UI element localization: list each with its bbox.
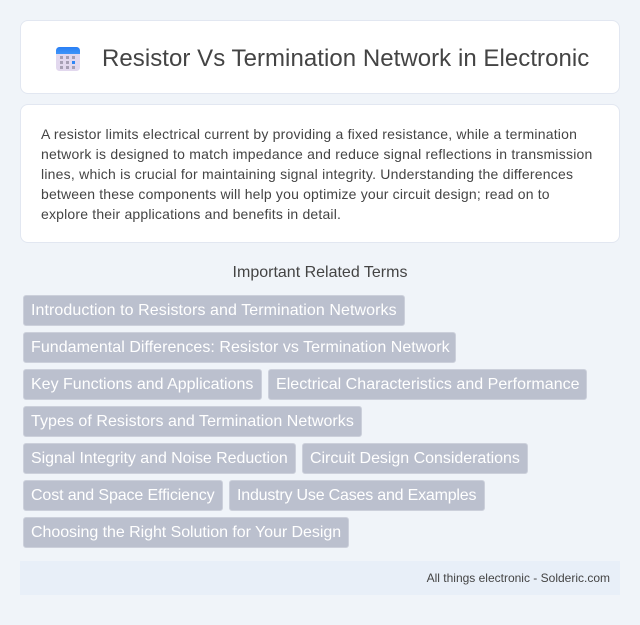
- description text: A resistor limits electrical current by providing a fixed resistance, while a termination: [41, 126, 577, 142]
- tag: Fundamental Differences: Resistor vs Termination Network: [31, 339, 450, 356]
- description text: [41, 126, 593, 222]
- tag: [23, 443, 296, 474]
- description text: explore their applications and benefits in detail.: [41, 206, 341, 222]
- description text: between these components will help you optimize your circuit design; read on to: [41, 186, 550, 202]
- tag: Industry Use Cases and Examples: [237, 487, 476, 504]
- tag: Electrical Characteristics and Performance: [276, 376, 580, 393]
- description text: network is designed to match impedance and reduce signal reflections in transmission: [41, 146, 593, 162]
- panel: description: [20, 104, 620, 243]
- description text: lines, which is crucial for maintaining signal integrity. Understanding the differences: [41, 166, 573, 182]
- footer bar: [20, 561, 620, 595]
- heading: related terms: Important Related Terms: [233, 264, 407, 281]
- icon: calendar: [56, 47, 80, 71]
- panel: related term tags: [23, 295, 587, 548]
- tag: Introduction to Resistors and Termination Networks: [31, 302, 397, 319]
- title: Resistor Vs Termination Network in Electronic: [102, 45, 589, 72]
- tag: Signal Integrity and Noise Reduction: [31, 450, 288, 467]
- tag: [23, 480, 223, 511]
- tag: [23, 406, 362, 437]
- tag: [229, 480, 485, 511]
- tag: [23, 369, 262, 400]
- tag: [23, 517, 349, 548]
- tag: Cost and Space Efficiency: [31, 487, 214, 504]
- tag: [23, 332, 456, 363]
- footer credit: All things electronic - Solderic.com: [427, 571, 610, 585]
- tag: [302, 443, 528, 474]
- tag: Circuit Design Considerations: [310, 450, 520, 467]
- tag: [23, 295, 405, 326]
- tag: Types of Resistors and Termination Networks: [31, 413, 354, 430]
- tag: [268, 369, 587, 400]
- header card: [20, 20, 620, 94]
- tag: Key Functions and Applications: [31, 376, 253, 393]
- tag: Choosing the Right Solution for Your Design: [31, 524, 341, 541]
